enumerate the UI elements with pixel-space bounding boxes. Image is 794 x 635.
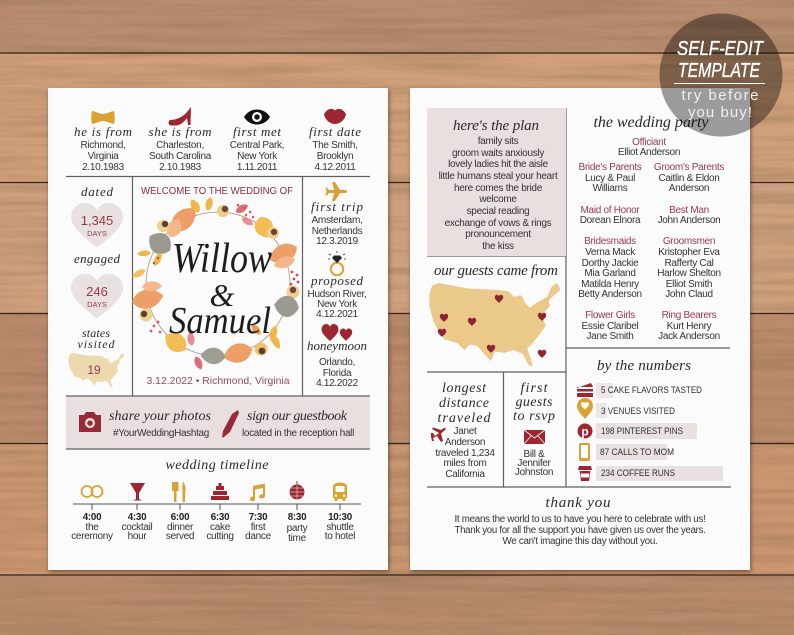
- longest distance cell: California: [445, 469, 485, 480]
- he is from: 2.10.1983: [82, 162, 125, 173]
- step 4:30: 4:30: [128, 512, 147, 523]
- icon: eye: [244, 110, 270, 124]
- icon: phone: [579, 443, 590, 461]
- icon: map pin: [577, 398, 593, 419]
- wedding party list: Jack Anderson: [658, 331, 720, 342]
- number labels: [600, 385, 702, 479]
- step 6:00: served: [166, 531, 194, 542]
- step 8:30: 8:30: [288, 512, 307, 523]
- first guests cell: [513, 381, 555, 478]
- he is from: [74, 124, 132, 173]
- wedding party list: Dorthy Jackie: [582, 258, 639, 269]
- step 8:30: party: [287, 523, 308, 534]
- dated counter: dated: [81, 184, 114, 199]
- engaged counter: 246: [86, 284, 108, 299]
- step 4:00: ceremony: [71, 531, 113, 542]
- step 4:30: cocktail: [122, 522, 153, 533]
- icon: pen: [222, 410, 239, 438]
- first trip: Netherlands: [312, 226, 363, 237]
- plan list: exchange of vows & rings: [445, 218, 552, 229]
- icon: cake: [211, 483, 229, 500]
- wedding party list: John Anderson: [658, 215, 720, 226]
- longest distance cell: miles from: [443, 458, 487, 469]
- wedding timeline title: wedding timeline: [166, 458, 268, 473]
- first date: The Smith,: [312, 140, 358, 151]
- first met: Central Park,: [230, 140, 284, 151]
- number labels: 5 CAKE FLAVORS TASTED: [601, 385, 702, 396]
- welcome heading: WELCOME TO THE WEDDING OF: [141, 185, 293, 197]
- wedding party heading: the wedding party: [594, 114, 709, 131]
- icon: lips: [324, 109, 346, 124]
- plan list: family sits: [478, 136, 519, 147]
- step 7:30: first: [251, 522, 266, 533]
- wedding party list: Elliot Anderson: [618, 147, 680, 158]
- step 6:00: 6:00: [171, 512, 190, 523]
- icon: camera: [79, 412, 101, 432]
- icon: pinterest: [578, 424, 592, 438]
- sign our guestbook: [242, 409, 354, 439]
- icon: airplane: [326, 182, 347, 201]
- first guests cell: Jennifer: [517, 458, 552, 469]
- share your photos: #YourWeddingHashtag: [113, 428, 209, 439]
- longest distance cell: [431, 381, 495, 480]
- plan list: special reading: [467, 206, 529, 217]
- engaged counter: DAYS: [87, 300, 107, 309]
- wedding party list: Anderson: [669, 183, 709, 194]
- plan list: welcome: [478, 194, 517, 205]
- wedding party list: Elliot Smith: [666, 279, 712, 290]
- first guests cell: to rsvp: [513, 409, 555, 424]
- icon: rings: [82, 486, 102, 497]
- number labels: 234 COFFEE RUNS: [601, 468, 675, 479]
- step 8:30: [287, 512, 308, 544]
- step 6:00: dinner: [167, 522, 194, 533]
- guest map: [429, 283, 561, 367]
- states visited: 19: [87, 363, 101, 377]
- wedding party list: Lucy & Paul: [585, 173, 635, 184]
- icon: envelope: [524, 430, 545, 444]
- engaged counter: [71, 251, 123, 319]
- step 4:00: [71, 512, 113, 542]
- number labels: 87 CALLS TO MOM: [600, 447, 674, 458]
- longest distance cell: longest: [442, 381, 487, 396]
- number labels: 198 PINTEREST PINS: [601, 426, 683, 437]
- badge: self-edit template: try before: [682, 87, 758, 104]
- icon: red plane: [431, 428, 446, 442]
- longest distance cell: traveled: [438, 411, 492, 426]
- wreath: [130, 196, 301, 371]
- wedding party list: Maid of Honor: [581, 205, 640, 216]
- icon: cake slice: [577, 383, 593, 397]
- first date: 4.12.2011: [314, 162, 356, 173]
- date and venue: 3.12.2022 • Richmond, Virginia: [146, 375, 290, 387]
- plan heading: here's the plan: [453, 118, 539, 134]
- icon: bow tie: [91, 111, 115, 124]
- plan list: here comes the bride: [454, 183, 543, 194]
- icon: two hearts: [322, 324, 352, 341]
- first guests cell: first: [520, 381, 549, 396]
- plan list: pronouncement: [465, 229, 531, 240]
- step 4:30: [122, 512, 153, 542]
- thank you: thank you: [546, 495, 610, 511]
- she is from: South Carolina: [149, 151, 212, 162]
- by the numbers chart: [577, 383, 723, 481]
- honeymoon: Florida: [323, 368, 352, 379]
- couple names: [169, 236, 272, 342]
- she is from: Charleston,: [156, 140, 204, 151]
- wedding party list: Rafferty Cal: [664, 258, 714, 269]
- sign our guestbook: sign our guestbook: [247, 409, 348, 424]
- step 6:00: [166, 512, 194, 542]
- badge: self-edit template: [660, 14, 782, 136]
- our guests heading: our guests came from: [434, 263, 558, 279]
- thank you: [454, 495, 706, 547]
- share your photos: [109, 409, 212, 439]
- couple names: Willow: [172, 236, 272, 282]
- wedding party list: Flower Girls: [585, 310, 635, 321]
- page: right card: [410, 88, 750, 570]
- couple names: Samuel: [169, 300, 271, 342]
- first met: 1.11.2011: [237, 162, 278, 173]
- longest distance cell: Anderson: [445, 437, 485, 448]
- first met: [230, 124, 284, 173]
- wedding party list: Mia Garland: [584, 268, 636, 279]
- she is from: she is from: [148, 124, 212, 139]
- proposed: 4.12.2021: [316, 309, 359, 320]
- step 6:30: 6:30: [211, 512, 230, 523]
- wedding party list: Groom's Parents: [654, 162, 724, 173]
- wedding party list: Kristopher Eva: [658, 247, 720, 258]
- thank you: We can't imagine this day without you.: [502, 536, 658, 547]
- honeymoon: [307, 338, 367, 389]
- icon: cocktail: [130, 483, 145, 500]
- honeymoon: honeymoon: [307, 338, 367, 353]
- badge: self-edit template: TEMPLATE: [678, 60, 761, 82]
- icon: diamond ring: [328, 251, 346, 275]
- thank you: Thank you for all the support you have given us over the years.: [454, 525, 706, 536]
- proposed: proposed: [310, 273, 364, 288]
- sign our guestbook: located in the reception hall: [242, 428, 354, 439]
- first met: New York: [237, 151, 278, 162]
- timeline: [71, 481, 361, 544]
- she is from: 2.10.1983: [159, 162, 202, 173]
- first guests cell: guests: [516, 395, 553, 410]
- wedding party list: Essie Claribel: [582, 321, 639, 332]
- states visited: visited: [78, 337, 116, 351]
- wedding party list: Bride's Parents: [578, 162, 642, 173]
- first date: [309, 124, 361, 173]
- icon: pinterest: p: [581, 424, 589, 438]
- first guests cell: Johnston: [515, 467, 553, 478]
- proposed: New York: [317, 299, 358, 310]
- wedding party list: Harlow Shelton: [657, 268, 721, 279]
- step 6:30: [206, 512, 234, 542]
- badge: self-edit template: you buy!: [688, 104, 752, 121]
- number labels: 3 VENUES VISITED: [601, 406, 675, 417]
- wedding party list: Kurt Henry: [667, 321, 712, 332]
- step 8:30: time: [288, 533, 307, 544]
- first met: first met: [233, 124, 281, 139]
- wedding party list: Caitlin & Eldon: [658, 173, 720, 184]
- icon: music note: [250, 484, 265, 501]
- first trip: 12.3.2019: [316, 236, 359, 247]
- step 10:30: [325, 512, 355, 542]
- icon: high heel: [169, 107, 191, 126]
- honeymoon: Orlando,: [319, 357, 355, 368]
- panel: share band: [66, 396, 370, 449]
- wedding party list: [578, 137, 724, 342]
- honeymoon: 4.12.2022: [316, 378, 359, 389]
- plan list: the kiss: [482, 241, 514, 252]
- icon: disco ball: [290, 481, 304, 500]
- wedding party list: Williams: [593, 183, 628, 194]
- step 4:30: hour: [128, 531, 147, 542]
- she is from: [148, 124, 212, 173]
- he is from: he is from: [74, 124, 132, 139]
- he is from: Virginia: [88, 151, 119, 162]
- wedding party list: Jane Smith: [586, 331, 634, 342]
- first guests cell: Bill &: [524, 449, 545, 460]
- proposed: Hudson River,: [308, 289, 366, 300]
- first trip: first trip: [311, 199, 364, 214]
- step 10:30: to hotel: [325, 531, 355, 542]
- plan list: groom waits anxiously: [452, 148, 544, 159]
- first date: Brooklyn: [317, 151, 353, 162]
- share your photos: share your photos: [109, 409, 212, 424]
- wedding party list: Bridesmaids: [584, 236, 636, 247]
- thank you: It means the world to us to have you here to celebrate with us!: [454, 514, 706, 525]
- wedding party list: Dorean Elnora: [580, 215, 641, 226]
- plan list: [439, 136, 558, 252]
- dated counter: [71, 184, 123, 248]
- dated counter: DAYS: [87, 229, 107, 238]
- wedding party list: Ring Bearers: [662, 310, 717, 321]
- wedding party list: Matilda Henry: [581, 279, 639, 290]
- icon: shuttle bus: [333, 482, 347, 501]
- first trip: [311, 199, 364, 247]
- wedding party list: Verna Mack: [585, 247, 636, 258]
- first trip: Amsterdam,: [312, 215, 362, 226]
- he is from: Richmond,: [80, 140, 126, 151]
- wedding party list: Betty Anderson: [578, 289, 642, 300]
- longest distance cell: Janet: [454, 426, 477, 437]
- step 7:30: dance: [245, 531, 272, 542]
- step 6:30: cutting: [206, 531, 234, 542]
- states visited: states: [82, 326, 110, 340]
- step 10:30: shuttle: [326, 522, 354, 533]
- step 4:00: the: [85, 522, 99, 533]
- icon: cutlery: [172, 482, 186, 502]
- step 7:30: 7:30: [249, 512, 268, 523]
- longest distance cell: traveled 1,234: [435, 448, 495, 459]
- couple names: &: [210, 277, 235, 313]
- dated counter: 1,345: [81, 213, 113, 228]
- page: left card: [48, 88, 388, 570]
- step 10:30: 10:30: [328, 512, 353, 523]
- step 6:30: cake: [210, 522, 231, 533]
- panel: here's the plan: [427, 108, 566, 256]
- wedding party list: John Claud: [665, 289, 713, 300]
- proposed: [308, 273, 366, 320]
- longest distance cell: distance: [439, 396, 489, 411]
- by the numbers heading: by the numbers: [597, 358, 691, 374]
- plan list: lovely ladies hit the aisle: [448, 159, 549, 170]
- step 4:00: 4:00: [83, 512, 102, 523]
- wedding party list: Officiant: [632, 137, 666, 148]
- states visited: [69, 326, 124, 388]
- engaged counter: engaged: [74, 251, 120, 266]
- plan list: little humans steal your heart: [439, 171, 558, 182]
- icon: coffee cup: [578, 466, 592, 481]
- wedding party list: Groomsmen: [663, 236, 715, 247]
- wedding party list: Best Man: [669, 205, 709, 216]
- first date: first date: [309, 124, 361, 139]
- badge: self-edit template: SELF-EDIT: [677, 38, 764, 60]
- step 7:30: [245, 512, 272, 542]
